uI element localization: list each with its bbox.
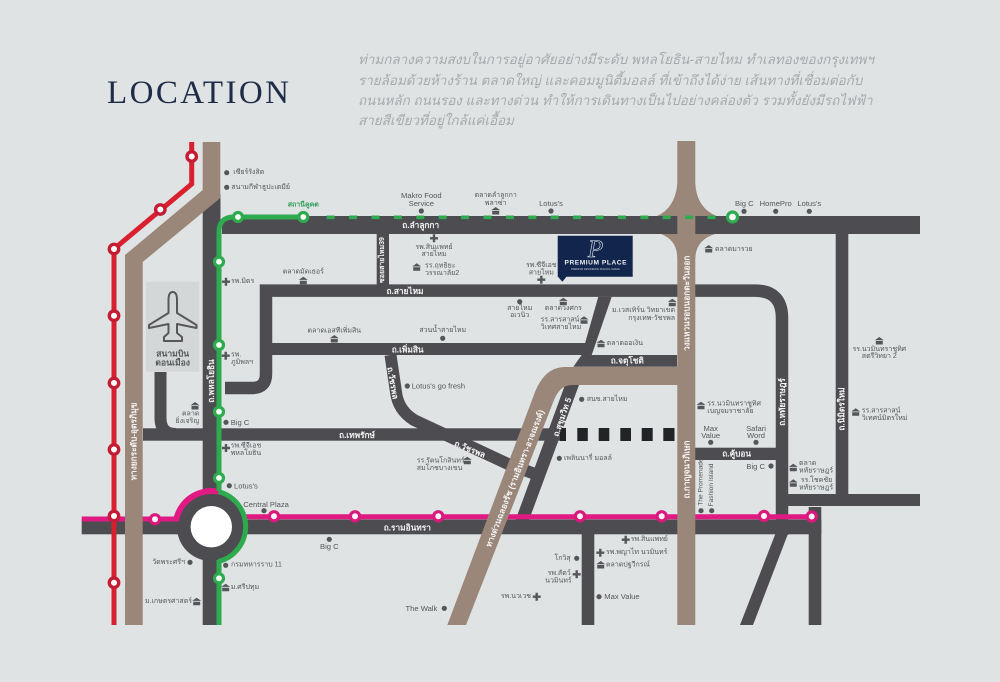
poi: Central Plaza	[243, 500, 290, 513]
poi: Nawamin Satri Witthaya school	[852, 337, 907, 360]
poi: CGH Phahonyothin hospital: พหลโยธิน	[231, 448, 261, 457]
poi: ST Phoemsin market: ตลาดเอสทีเพิ่มสิน	[308, 326, 361, 334]
poi: Lotus's Ring Road	[797, 199, 821, 214]
poi: Nawamin Benchama school: เบญจมราชาลัย	[707, 407, 754, 415]
poi: Synphaet Sai Mai hospital: สายไหม	[421, 249, 447, 258]
poi: Maruay market	[704, 245, 753, 253]
poi: Makro Food Service: Service	[409, 199, 434, 208]
poi: Big C Khubon	[746, 462, 774, 471]
road names: ทางยกระดับ-อุตรภิมุข	[128, 402, 140, 480]
poi: Nawamin animal hospital	[545, 569, 581, 584]
points of interest	[145, 168, 907, 613]
poi: Pleanary Mall	[557, 453, 612, 462]
poi: Lotus's Phahonyothin: Lotus's	[234, 482, 258, 490]
poi: Sripatum University	[221, 583, 259, 591]
intro paragraph: ถนนหลัก ถนนรอง และทางด่วน ทำให้การเดินทางเป็นไปอย่างคล่องตัว รวมทั้งยังมีรถไฟฟ้า	[358, 90, 873, 108]
poi: Chokchai Hathairat school	[789, 475, 833, 492]
poi: Lotus's Lam Luk Ka: Lotus's	[539, 199, 563, 208]
poi: Max Value Ring Road	[701, 424, 720, 445]
poi: Central Plaza: Central Plaza	[243, 500, 290, 509]
poi: Rattanakosin school: รร.รัตนโกสินทร์	[417, 456, 465, 464]
poi: Chokchai Hathairat school: หทัยราษฎร์	[799, 484, 833, 492]
red line	[114, 142, 192, 625]
poi: Lotus's go fresh: Lotus's go fresh	[412, 382, 465, 390]
poi: Sripatum University: ม.ศรีปทุม	[231, 583, 259, 591]
airport panel	[146, 282, 199, 372]
road names: ถ.สุขุมวิท 5	[551, 396, 574, 438]
poi: Zeer Rangsit	[224, 168, 265, 176]
poi: Nawamin Satri Witthaya school: รร.นวมินทราชูทิศ	[852, 345, 907, 353]
poi: Makro Food Service	[401, 191, 442, 214]
poi: Makro Food Service: Makro Food	[401, 191, 442, 200]
road names: ถ.จตุโชติ	[611, 356, 644, 367]
poi: Bhumibol hospital	[222, 352, 253, 366]
poi: CGH Sai Mai hospital: สายไหม	[529, 268, 554, 276]
poi: Pleanary Mall: เพลินนารี่ มอลล์	[564, 453, 612, 462]
intro paragraph: ท่ามกลางความสงบในการอยู่อาศัยอย่างมีระดับ พหลโยธิน-สายไหม ทำเลทองของกรุงเทพฯ	[358, 51, 875, 68]
poi: Hathairat market	[789, 460, 833, 474]
poi: Sai Mai Avenue: อเวนิว	[510, 311, 529, 319]
poi: Max Value Ring Road: Value	[701, 431, 720, 440]
poi: Safari World: Word	[747, 431, 765, 440]
poi: CGH Phahonyothin hospital: รพ.ซีจีเอช	[231, 442, 261, 450]
poi: Lotus's Ring Road: Lotus's	[797, 199, 821, 208]
poi: Sarasas Sai Mai school: รร.สารสาสน์	[541, 316, 580, 324]
poi: Nawawet hospital	[501, 593, 541, 601]
airport label: สนามบิน	[156, 348, 189, 358]
poi: Ying Charoen market: ตลาด	[182, 410, 199, 418]
poi: Mitr hospital	[222, 277, 254, 286]
poi: Or Ngoen market	[596, 339, 643, 347]
poi: Mother market: ตลาดมัดเธอร์	[283, 268, 324, 276]
poi: Wongsakorn market: ตลาดวงศกร	[545, 305, 582, 312]
tagline: PREMIUM RESIDENCE PHAHOL-SAIMAI	[571, 267, 620, 271]
BTS dashed section blocks	[560, 428, 674, 441]
poi: Ying Charoen market: ยิ่งเจริญ	[176, 416, 199, 425]
map	[82, 141, 920, 625]
poi: Sai Mai district office: สนข.สายไหม	[587, 394, 628, 403]
poi: Big C Ring Road	[735, 199, 754, 214]
road names: ถ.หทัยราษฎร์	[777, 378, 787, 426]
poi: Sarasas Mit Mai school: วิเทศน์มิตรใหม่	[862, 413, 907, 422]
poi: Lam Luk Ka Plaza	[475, 191, 517, 214]
poi: Nawamin Satri Witthaya school: สตรีวิทยา 2	[862, 352, 897, 360]
poi: Rattanakosin school: สมโภชบางเขน	[417, 463, 463, 472]
green line	[218, 217, 726, 625]
poi: Sarasas Sai Mai school	[541, 316, 588, 331]
airport label: ดอนเมือง	[155, 358, 190, 368]
road names: ซอยสายไหม39	[377, 237, 386, 283]
poi: Bhumibol hospital: ภูมิพลฯ	[231, 358, 253, 366]
poi: Maruay market: ตลาดมารวย	[715, 246, 753, 253]
poi: Synphaet Sai Mai hospital	[415, 234, 453, 258]
poi: Max Value Nawamin: Max Value	[604, 592, 640, 601]
poi: Max Value Ring Road: Max	[704, 424, 718, 433]
poi: Big C Ring Road: Big C	[735, 199, 754, 208]
poi: Phyathai Nawamin hospital: รพ.พญาไท นวมินทร์	[606, 547, 668, 556]
intro paragraph: รายล้อมด้วยห้างร้าน ตลาดใหญ่ และคอมมูนิตี้มอลล์ ที่เข้าถึงได้ง่าย เส้นทางที่เชื่อมต่อกับ	[358, 70, 864, 89]
station label: Khu Khot: สถานีคูคต	[288, 200, 319, 210]
brand name: PREMIUM PLACE	[564, 260, 627, 266]
highways	[125, 141, 716, 625]
pink stations	[150, 511, 816, 524]
road names: ถ.สายไหม	[386, 286, 424, 296]
poi: Mitr hospital: รพ.มิตร	[231, 277, 254, 285]
poi: Kowit	[554, 553, 579, 562]
poi: Rittiya school: วรรณาลัย2	[425, 269, 459, 277]
intro paragraph	[358, 51, 875, 129]
road names: ถ.นิมิตรใหม่	[837, 387, 847, 431]
poi: Or Ngoen market: ตลาดออเงิน	[607, 339, 643, 347]
poi: Hathairat market: หทัยราษฎร์	[799, 466, 833, 474]
poi: Safari World: Safari	[746, 424, 766, 433]
poi: Zeer Rangsit: เซียร์รังสิต	[233, 168, 265, 176]
poi: Sarasas Mit Mai school: รร.สารสาสน์	[862, 406, 901, 414]
poi: Bhumibol hospital: รพ.	[231, 352, 241, 358]
road names	[128, 220, 847, 548]
poi: 11th Infantry: กรมทหารราบ 11	[231, 562, 282, 568]
poi: Sai Mai district office	[579, 394, 628, 403]
poi: Nawamin animal hospital: รพ.สัตว์	[548, 569, 571, 577]
road names: ถ.พหลโยธิน	[206, 359, 216, 403]
road names: ถ.กาญจนาภิเษก	[682, 440, 692, 499]
road names: วงแหวนรอบนอกตะวันออก	[682, 256, 692, 351]
poi: Synphaet hospital: รพ.สินแพทย์	[631, 535, 668, 543]
poi: Sarasas Sai Mai school: วิเทศสายไหม	[541, 322, 581, 331]
poi: CGH Sai Mai hospital: รพ.ซีจีเอช	[526, 261, 557, 269]
poi: Mother market	[283, 268, 324, 284]
poi: HomePro	[760, 199, 792, 214]
poi: Nawamin Benchama school	[696, 400, 762, 415]
road names: ถ.เทพรักษ์	[339, 430, 376, 440]
road names: ถ.คู้บอน	[722, 449, 751, 460]
poi: Rittiya school: รร.ฤทธิยะ	[425, 262, 456, 270]
poi: Synphaet hospital	[622, 535, 668, 544]
poi: Kasetsart University: ม.เกษตรศาสตร์	[145, 597, 192, 605]
poi: Sai Mai water park: สวนน้ำสายไหม	[419, 323, 466, 334]
icon: airplane	[149, 292, 196, 341]
red stations	[109, 152, 196, 587]
road names: ถ.ลำลูกกา	[402, 220, 439, 231]
poi: Sarasas Mit Mai school	[851, 406, 907, 422]
poi: Western University: ม.เวสเทิร์น วิทยาเขต	[612, 306, 675, 314]
road network	[82, 194, 920, 625]
poi: The Promenade: The Promenade	[698, 458, 704, 506]
poi: Wongsakorn market	[545, 298, 582, 312]
poi: ST Phoemsin market	[308, 326, 361, 342]
poi: Nawamin animal hospital: นวมินทร์	[545, 576, 572, 584]
poi: Western University: กรุงเทพ-วัชรพล	[628, 314, 675, 322]
poi: Ying Charoen market	[176, 402, 200, 425]
road names: ทางด่วนฉลองรัช (รามอินทรา-อาจณรงค์)	[483, 408, 546, 548]
intro paragraph: สายสีเขียวที่อยู่ใกล้แค่เอื้อม	[358, 110, 515, 129]
poi: Hathairat market: ตลาด	[799, 460, 816, 467]
poi: Safari World	[746, 424, 766, 445]
poi: Big C Ramindra: Big C	[320, 542, 339, 551]
poi: Sai Mai water park	[419, 323, 466, 341]
poi: Thupatemee stadium: สนามกีฬาธูปะเตมีย์	[231, 183, 290, 191]
poi: Fashion Island: Fashion Island	[708, 463, 715, 506]
poi: HomePro: HomePro	[760, 199, 792, 208]
poi: Big C Khubon: Big C	[746, 462, 766, 471]
poi: Sai Mai Avenue	[507, 299, 532, 319]
road names: ถ.รามอินทรา	[384, 522, 431, 532]
roundabout centre	[191, 506, 232, 547]
pink line	[82, 491, 812, 521]
poi: The Walk: The Walk	[406, 604, 437, 613]
poi: Patavikorn market: ตลาดปฐวีกรณ์	[606, 560, 651, 568]
poi: Rattanakosin school	[417, 456, 472, 472]
poi: Phyathai Nawamin hospital	[596, 547, 668, 557]
poi: Chokchai Hathairat school: รร.โชคชัย	[801, 475, 832, 484]
title: LOCATION	[107, 75, 289, 111]
logo mark: P	[587, 236, 603, 263]
road names: ถ.เพิ่มสิน	[392, 344, 424, 354]
poi: Kowit: โกวิสุ	[554, 553, 571, 562]
poi: Synphaet Sai Mai hospital: รพ.สินแพทย์	[415, 243, 453, 251]
poi: Lam Luk Ka Plaza: พลาซ่า	[485, 200, 507, 207]
green stations	[214, 212, 738, 583]
road names: ถ.วัชรพล	[453, 438, 487, 460]
poi: Wat Phra Si: วัดพระศรีฯ	[152, 558, 185, 566]
poi: Rittiya school	[412, 262, 459, 277]
poi: Nawamin Benchama school: รร.นวมินทราชูทิศ	[707, 400, 762, 408]
road names: ถ.วัชรพล	[385, 366, 401, 400]
poi: Sai Mai Avenue: สายไหม	[507, 303, 532, 312]
badge: Premium Place	[558, 236, 633, 282]
poi: CGH Sai Mai hospital	[526, 261, 557, 284]
poi: Lotus's Lam Luk Ka	[539, 199, 563, 214]
poi: Big C Ramindra	[320, 537, 339, 551]
poi: Western University	[612, 299, 677, 322]
poi: Lam Luk Ka Plaza: ตลาดลำลูกกา	[475, 191, 517, 199]
poi: Big C Saphan Mai: Big C	[231, 418, 250, 427]
poi: CGH Phahonyothin hospital	[222, 442, 261, 457]
poi: Nawawet hospital: รพ.นวเวช	[501, 593, 531, 600]
